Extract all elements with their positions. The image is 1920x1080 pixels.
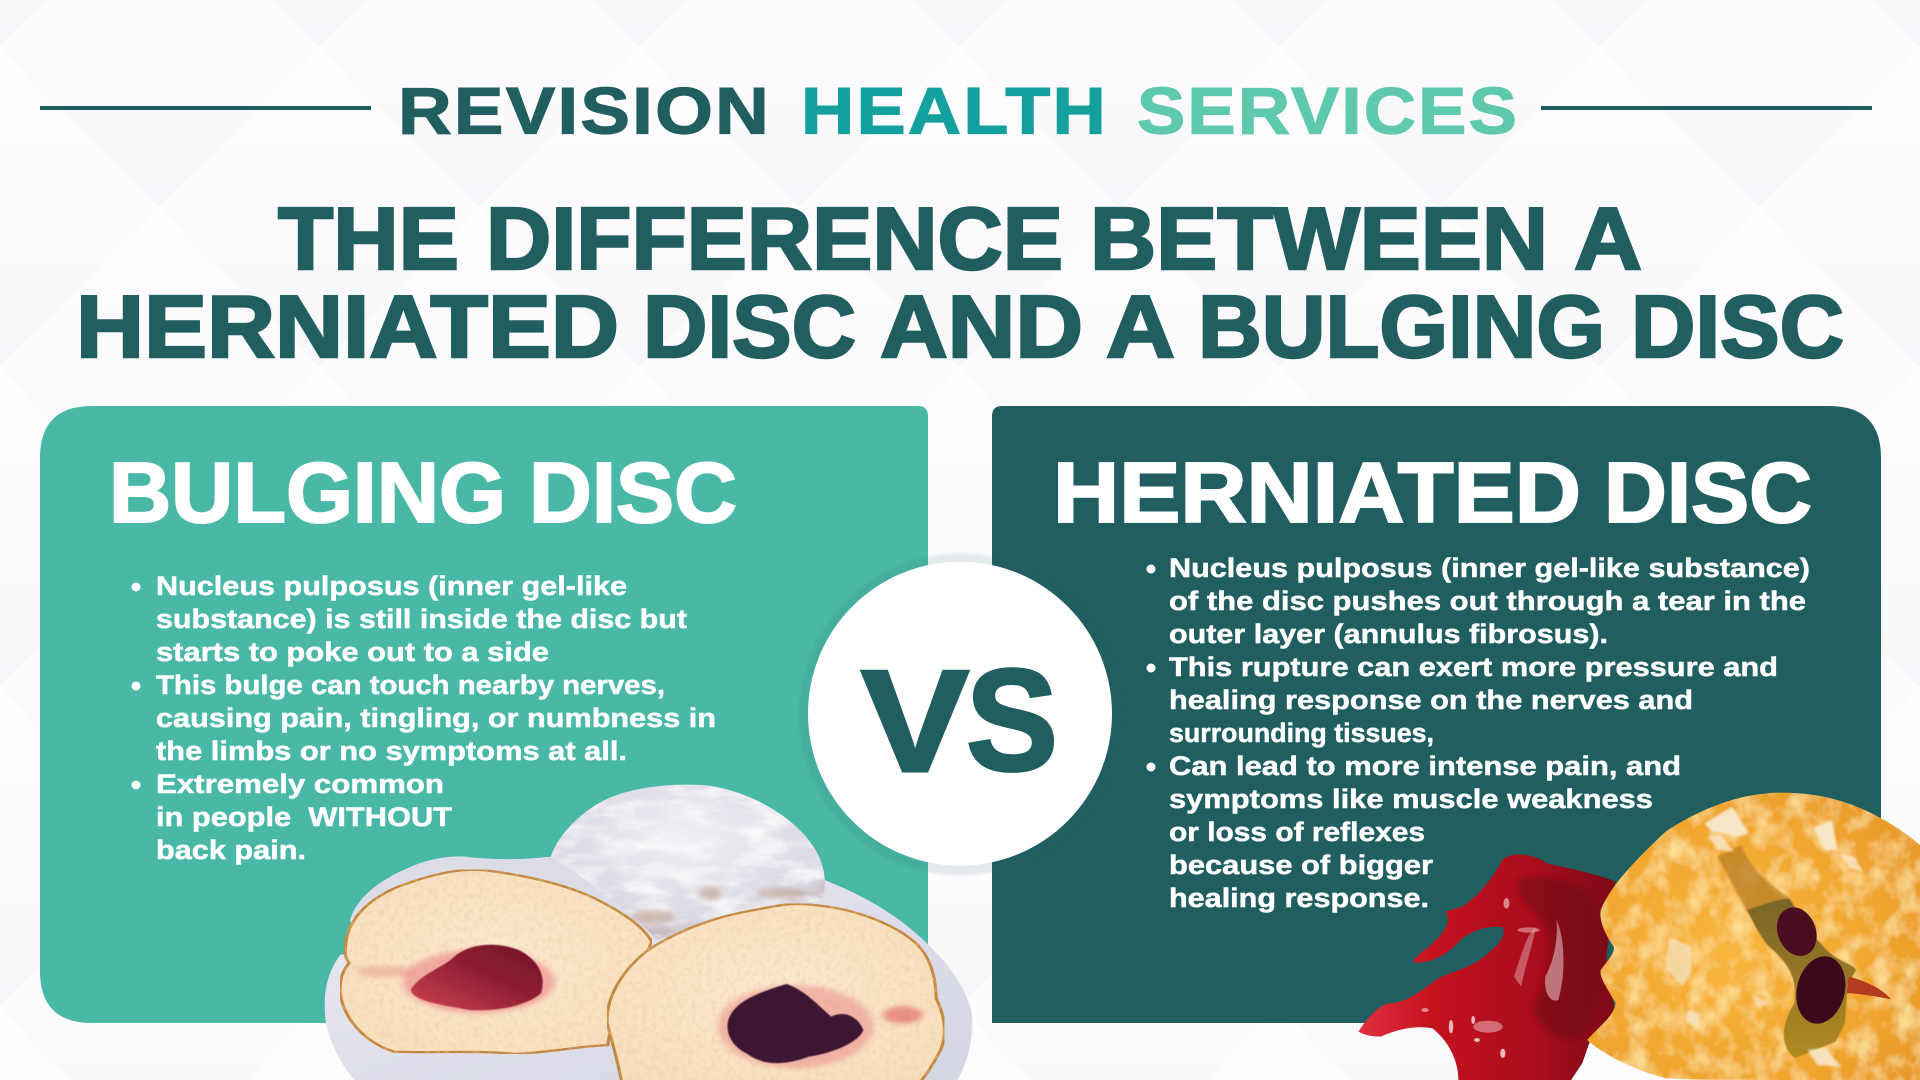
heading: herniated disc	[1053, 446, 1812, 541]
left jam filling	[411, 945, 543, 1010]
right jam filling	[727, 984, 863, 1063]
panel: herniated disc	[992, 406, 1881, 1023]
bullet list: herniated disc: symptoms like muscle weakness	[1169, 784, 1653, 814]
left jam halo	[403, 950, 554, 1013]
left half glaze rim	[350, 856, 653, 947]
brand header: SERVICES	[1137, 74, 1519, 148]
left pink streak	[356, 966, 414, 978]
bullet list: herniated disc: Can lead to more intense pain, and	[1169, 751, 1681, 781]
bullet list: herniated disc: This rupture can exert more pressure and	[1169, 652, 1778, 682]
title: DIFFERENCE	[486, 189, 1063, 288]
heading: bulging disc: DISC	[529, 446, 737, 541]
bullet list: bulging disc: Nucleus pulposus (inner gel-like	[156, 571, 627, 601]
jam splat	[1358, 855, 1616, 1080]
illustration: jam doughnuts on plate (bulging disc)	[325, 785, 972, 1080]
VS badge: S	[966, 639, 1058, 801]
plate	[325, 860, 972, 1080]
jam dark fold	[1518, 877, 1605, 1039]
bullet list: bulging disc: substance) is still inside the disc but	[156, 604, 687, 634]
heading: bulging disc	[109, 446, 737, 541]
right jam halo	[717, 985, 874, 1068]
powdered whole doughnut	[550, 785, 825, 940]
title	[76, 189, 1844, 376]
bullet list: bulging disc: in people WITHOUT	[156, 802, 453, 832]
brand header: REVISION	[398, 74, 771, 148]
title: BULGING	[1198, 277, 1605, 376]
title: A	[1574, 189, 1642, 288]
bullet list: herniated disc	[1146, 553, 1810, 913]
left halved doughnut crumb	[340, 870, 652, 1054]
heading: herniated disc: HERNIATED	[1053, 446, 1581, 541]
brand header: HEALTH	[801, 74, 1108, 148]
jam smear	[1847, 977, 1891, 999]
bullet list: herniated disc: surrounding tissues,	[1169, 718, 1434, 748]
brand header	[40, 74, 1872, 148]
bullet list: herniated disc: or loss of reflexes	[1169, 817, 1425, 847]
panel: bulging disc	[40, 406, 928, 1023]
bullet list: herniated disc: healing response on the nerves and	[1169, 685, 1693, 715]
title: THE	[278, 189, 459, 288]
bullet list: herniated disc: healing response.	[1169, 883, 1429, 913]
right jam streak	[883, 1006, 923, 1024]
VS badge: V	[861, 640, 969, 802]
bullet list: bulging disc: This bulge can touch nearby nerves,	[156, 670, 665, 700]
bullet list: bulging disc: starts to poke out to a side	[156, 637, 549, 667]
bullet list: herniated disc: Nucleus pulposus (inner gel-like substance)	[1169, 553, 1810, 583]
bullet list: bulging disc: causing pain, tingling, or numbness in	[156, 703, 716, 733]
bullet list: herniated disc: because of bigger	[1169, 850, 1434, 880]
bullet list: bulging disc	[132, 571, 716, 865]
sugar flakes	[1666, 807, 1863, 1067]
title: DISC	[643, 277, 856, 376]
title: BETWEEN	[1090, 189, 1548, 288]
bullet list: bulging disc: back pain.	[156, 835, 306, 865]
right halved doughnut crumb	[607, 904, 944, 1080]
title: HERNIATED	[76, 277, 619, 376]
VS badge	[799, 554, 1121, 876]
title: AND	[880, 277, 1083, 376]
crack shadow	[1717, 845, 1789, 912]
heading: bulging disc: BULGING	[109, 446, 506, 541]
bullet list: herniated disc: outer layer (annulus fibrosus).	[1169, 619, 1608, 649]
bullet list: bulging disc: the limbs or no symptoms at all.	[156, 736, 627, 766]
jam blob upper	[1771, 903, 1822, 960]
doughnut crack	[1747, 898, 1856, 1058]
title: DISC	[1631, 277, 1844, 376]
bullet list: herniated disc: of the disc pushes out through a tear in the	[1169, 586, 1806, 616]
doughnut body	[1587, 793, 1920, 1080]
jam blob lower	[1791, 953, 1851, 1027]
jam shine	[1421, 898, 1564, 1058]
illustration: burst jam doughnut (herniated disc)	[1358, 793, 1920, 1080]
heading: herniated disc: DISC	[1604, 446, 1812, 541]
powder brown dusting	[630, 887, 807, 923]
bullet list: bulging disc: Extremely common	[156, 769, 444, 799]
title: A	[1106, 277, 1175, 376]
